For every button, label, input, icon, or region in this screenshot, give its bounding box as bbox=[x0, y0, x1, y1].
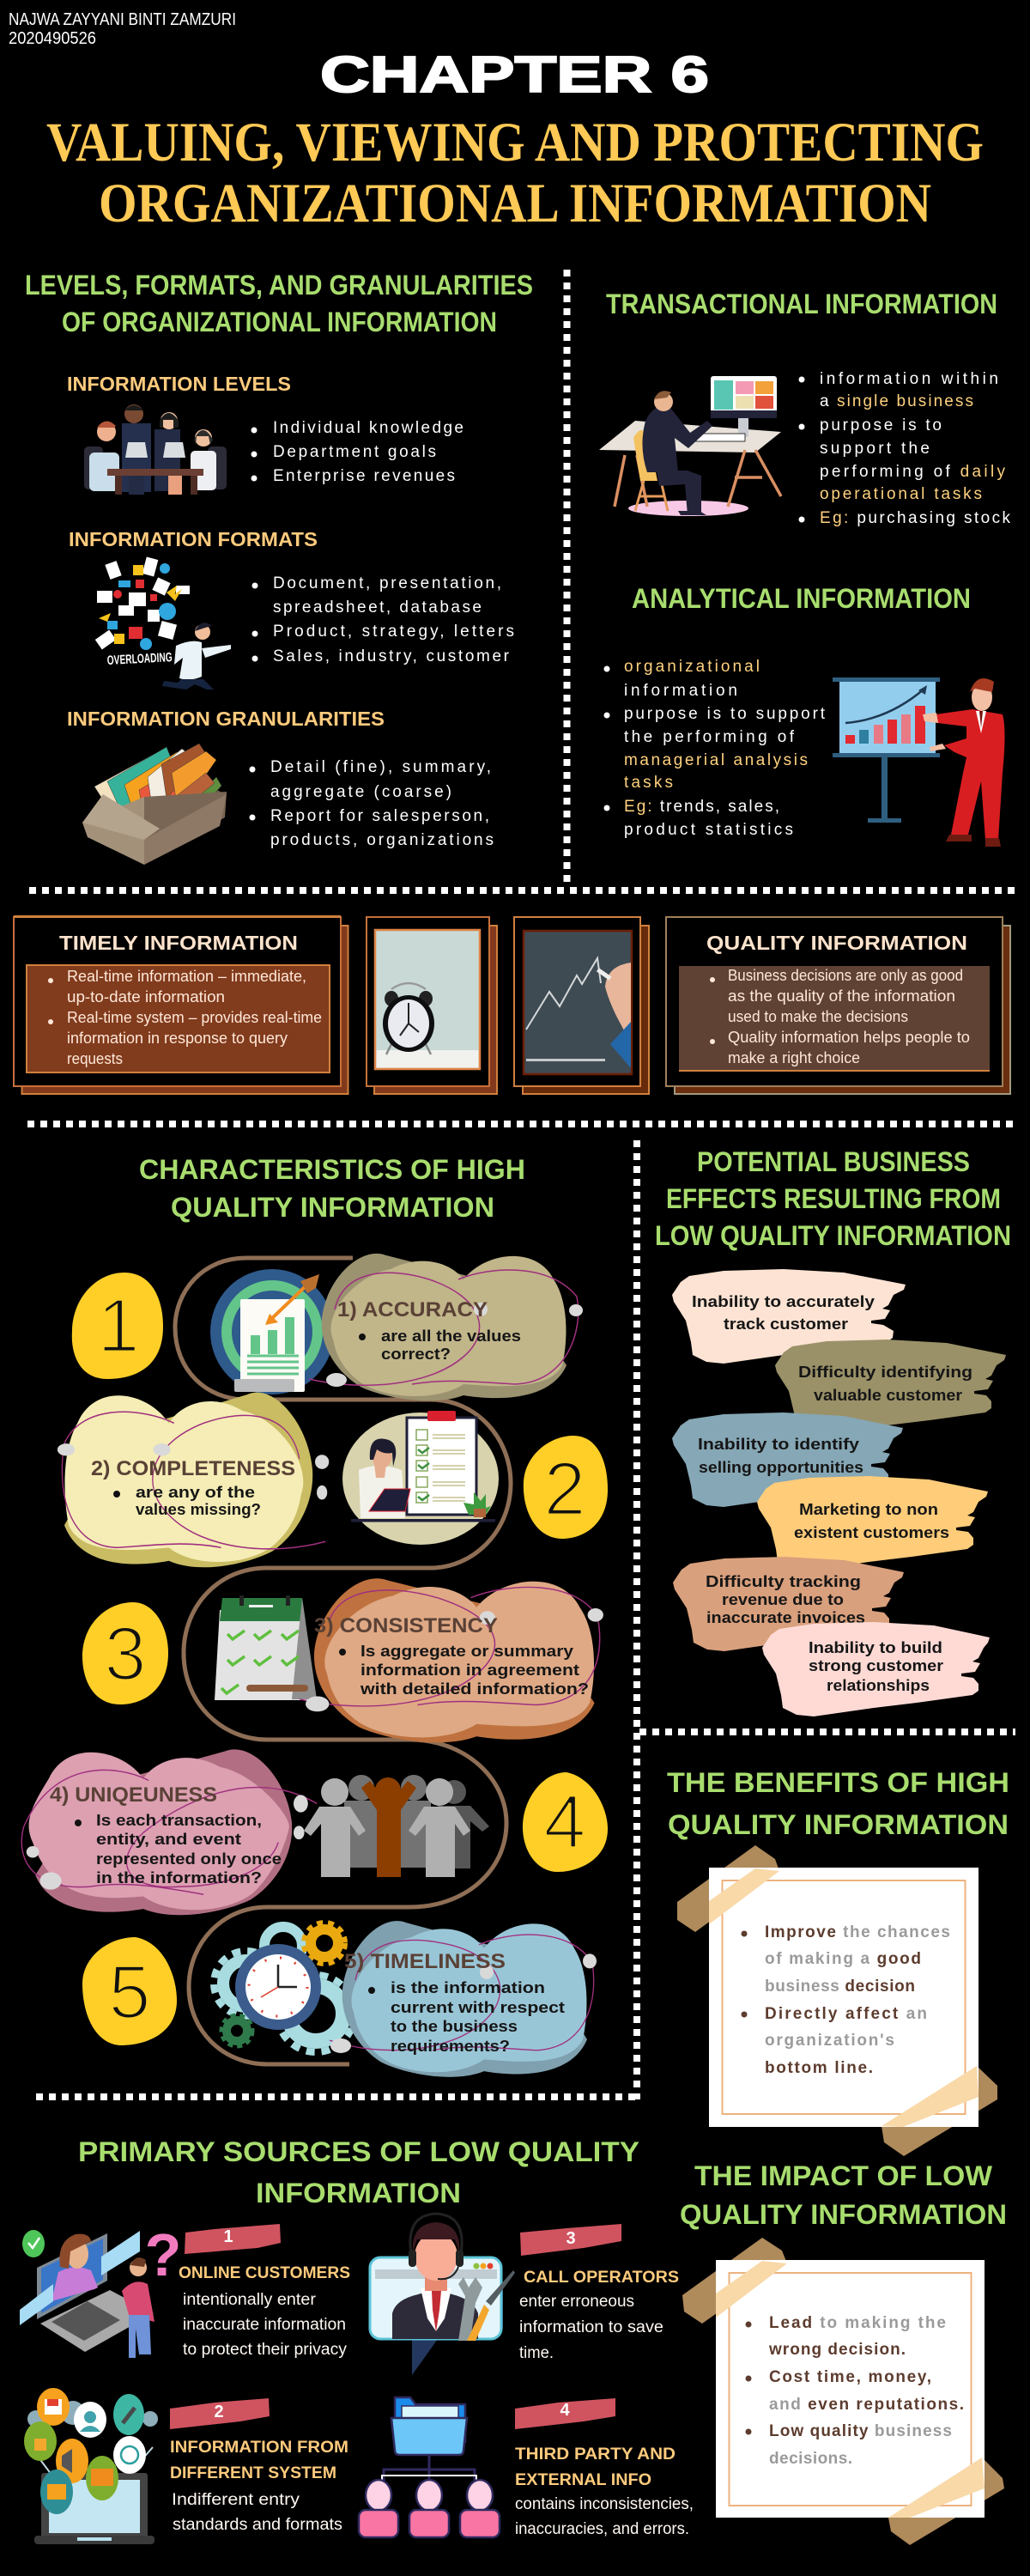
card: completeness: values missing? bbox=[136, 1501, 261, 1518]
text: call operators: enter erroneous bbox=[519, 2293, 634, 2311]
icon: group of people bbox=[304, 1775, 489, 1877]
list: levels bbox=[251, 419, 464, 485]
list: levels: Department goals bbox=[273, 443, 436, 461]
brush card: selling opportunities: Inability to identify bbox=[698, 1436, 859, 1453]
author name and id bbox=[9, 10, 236, 48]
red label 2: 2 bbox=[214, 2403, 224, 2421]
text: call operators: information to save bbox=[519, 2318, 663, 2336]
number badge 4: 4 bbox=[544, 1779, 585, 1864]
brush card: non existent customers: existent customers bbox=[794, 1524, 949, 1541]
text: online customers: ONLINE CUSTOMERS bbox=[179, 2264, 350, 2282]
note card: benefits: organization's bbox=[765, 2032, 894, 2050]
red label 4: 4 bbox=[560, 2401, 570, 2420]
brush card: track customer: Inability to accurately bbox=[692, 1293, 875, 1310]
heading: characteristics: CHARACTERISTICS OF HIGH bbox=[139, 1154, 525, 1185]
icon: box of books bbox=[82, 744, 227, 865]
card: completeness: are any of the bbox=[136, 1484, 255, 1501]
note card: benefits: Directly affect an bbox=[765, 2005, 927, 2023]
title: chapter name bbox=[46, 112, 984, 234]
icon: target report bbox=[210, 1269, 334, 1394]
text box: timely: Real-time system – provides real-time bbox=[67, 1009, 322, 1026]
brush card: selling opportunities bbox=[672, 1413, 903, 1507]
list: transactional: a single business bbox=[820, 392, 973, 410]
icon: business meeting bbox=[84, 404, 227, 495]
brush card: track customer: track customer bbox=[724, 1315, 848, 1333]
list: transactional: support the bbox=[820, 440, 930, 458]
tape: top left bbox=[677, 1845, 779, 1932]
subheading: information formats: INFORMATION FORMATS bbox=[69, 528, 318, 550]
text box: quality: Quality information helps people to bbox=[728, 1029, 970, 1046]
brush card: inaccurate invoices: Difficulty tracking bbox=[706, 1573, 861, 1590]
list: analytical bbox=[604, 658, 826, 839]
tape: top left bbox=[682, 2238, 787, 2324]
icon: gears and clock bbox=[214, 1923, 354, 2052]
list: analytical: product statistics bbox=[624, 821, 793, 839]
card: timeliness: to the business bbox=[391, 2018, 518, 2035]
card: uniqueness: 4) UNIQEUNESS bbox=[50, 1783, 217, 1807]
panel: benefits of high quality information bbox=[667, 1767, 1009, 2156]
heading: potential effects bbox=[655, 1146, 1011, 1251]
brush card: non existent customers: Marketing to non bbox=[799, 1501, 938, 1518]
list: analytical: purpose is to support bbox=[624, 705, 826, 723]
card: consistency: with detailed information? bbox=[360, 1680, 589, 1698]
list: formats: Product, strategy, letters bbox=[273, 623, 514, 641]
glyph: question mark: ? bbox=[145, 2221, 181, 2288]
card: accuracy: correct? bbox=[381, 1346, 451, 1363]
red label 1: 1 bbox=[223, 2227, 233, 2246]
heading: benefits: QUALITY INFORMATION bbox=[668, 1809, 1009, 1840]
panel: impact of low quality information bbox=[680, 2160, 1007, 2545]
card: consistency: Is aggregate or summary bbox=[360, 1643, 573, 1660]
number badge 1 bbox=[72, 1273, 163, 1379]
text: third party and external info: THIRD PARTY AND bbox=[515, 2445, 676, 2464]
text: third party and external info: inaccuracies, and errors. bbox=[515, 2520, 689, 2538]
icon: calendar bbox=[215, 1595, 317, 1700]
red label 2 bbox=[170, 2398, 270, 2429]
text box: timely: Real-time information – immediate, bbox=[67, 968, 306, 985]
card: timeliness: current with respect bbox=[391, 1999, 565, 2016]
text box: timely bbox=[27, 965, 330, 1072]
title: chapter: CHAPTER 6 bbox=[320, 46, 709, 103]
text: information from different system: INFORMATION FROM bbox=[170, 2439, 348, 2457]
heading: levels: OF ORGANIZATIONAL INFORMATION bbox=[62, 307, 497, 337]
panel: potential business effects bbox=[655, 1146, 1011, 1716]
heading: transactional: TRANSACTIONAL INFORMATION bbox=[606, 289, 997, 319]
panel: levels, formats and granularities bbox=[25, 270, 533, 865]
note card: impact: decisions. bbox=[769, 2450, 852, 2468]
icon: information overload bbox=[95, 557, 231, 690]
note card: impact: Lead to making the bbox=[769, 2314, 946, 2332]
card: consistency bbox=[300, 1578, 603, 1742]
note card: benefits: bottom line. bbox=[765, 2059, 873, 2077]
card: consistency: 3) CONSISTENCY bbox=[314, 1614, 498, 1637]
text: online customers: intentionally enter bbox=[183, 2291, 317, 2309]
card: uniqueness: entity, and event bbox=[96, 1831, 241, 1848]
list: granularities: Detail (fine), summary, bbox=[270, 758, 491, 776]
list: transactional: operational tasks bbox=[820, 485, 982, 503]
number badge 3 bbox=[82, 1602, 168, 1704]
list: levels: Enterprise revenues bbox=[273, 467, 455, 485]
card: timeliness: 5) TIMELINESS bbox=[344, 1950, 506, 1973]
list: analytical: managerial analysis bbox=[624, 751, 808, 769]
note card: impact bbox=[716, 2260, 985, 2518]
card: timeliness: is the information bbox=[391, 1979, 545, 1996]
card: timeliness: requirements? bbox=[391, 2038, 510, 2055]
card: accuracy: 1) ACCURACY bbox=[337, 1298, 488, 1321]
note card: impact: wrong decision. bbox=[768, 2341, 906, 2359]
panel: clock photo bbox=[367, 917, 497, 1094]
panel: quality information bbox=[666, 917, 1010, 1094]
note card: benefits: of making a good bbox=[765, 1950, 921, 1968]
panel: transactional information bbox=[599, 289, 1011, 527]
note card: impact: and even reputations. bbox=[769, 2396, 964, 2414]
icon: online customer at laptop bbox=[20, 2221, 181, 2358]
author name and id: NAJWA ZAYYANI BINTI ZAMZURI bbox=[9, 10, 236, 29]
brush card: selling opportunities: selling opportunities bbox=[699, 1459, 863, 1476]
number badge 2 bbox=[524, 1436, 608, 1539]
heading: characteristics bbox=[139, 1154, 525, 1223]
list: levels: Individual knowledge bbox=[273, 419, 464, 437]
list: granularities: aggregate (coarse) bbox=[270, 783, 451, 801]
brush card: valuable customer bbox=[775, 1340, 1006, 1434]
card: consistency: information in agreement bbox=[360, 1662, 579, 1679]
number badge 5 bbox=[82, 1937, 177, 2045]
text: online customers: inaccurate information bbox=[183, 2316, 346, 2334]
heading: levels: LEVELS, FORMATS, AND GRANULARITIES bbox=[25, 270, 533, 301]
text: call operators: CALL OPERATORS bbox=[524, 2269, 679, 2287]
card: uniqueness: Is each transaction, bbox=[96, 1812, 262, 1829]
text: information from different system: standards and formats bbox=[173, 2516, 342, 2534]
heading: primary sources bbox=[78, 2136, 639, 2208]
note card: benefits bbox=[709, 1868, 978, 2127]
list: analytical: Eg: trends, sales, bbox=[624, 798, 779, 816]
red label 1 bbox=[185, 2224, 281, 2254]
number badge 2: 2 bbox=[544, 1446, 585, 1531]
list: transactional: performing of daily bbox=[820, 463, 1006, 481]
text box: quality bbox=[679, 966, 990, 1072]
text box: quality: Business decisions are only as good bbox=[728, 967, 963, 984]
text box: quality: used to make the decisions bbox=[728, 1008, 908, 1025]
icon: checklist and woman bbox=[342, 1411, 499, 1545]
list: transactional: Eg: purchasing stock bbox=[820, 509, 1011, 527]
brush card: inaccurate invoices: inaccurate invoices bbox=[706, 1609, 865, 1626]
note card: benefits: business decision bbox=[765, 1978, 915, 1996]
heading: impact bbox=[680, 2160, 1007, 2230]
list: formats: Document, presentation, bbox=[273, 574, 501, 592]
title: chapter name: ORGANIZATIONAL INFORMATION bbox=[99, 173, 931, 234]
card title: quality: QUALITY INFORMATION bbox=[706, 932, 967, 954]
card: uniqueness: in the information? bbox=[96, 1869, 262, 1886]
panel: analytical information bbox=[604, 583, 1004, 847]
note card: impact: Cost time, money, bbox=[769, 2368, 931, 2386]
list: transactional: purpose is to bbox=[820, 416, 942, 434]
card: uniqueness: represented only once bbox=[96, 1850, 282, 1868]
note card: benefits: Improve the chances bbox=[765, 1923, 950, 1941]
panel: primary sources of low quality information bbox=[20, 2136, 694, 2544]
card: uniqueness bbox=[21, 1749, 317, 1915]
text: information from different system: Indifferent entry bbox=[172, 2491, 300, 2509]
card: accuracy bbox=[309, 1254, 583, 1400]
list: granularities: Report for salesperson, bbox=[270, 807, 489, 825]
icon: folder hierarchy bbox=[359, 2397, 500, 2537]
card title: timely: TIMELY INFORMATION bbox=[59, 932, 298, 954]
text: information from different system bbox=[170, 2439, 348, 2534]
text: call operators: time. bbox=[519, 2344, 554, 2362]
icon: call operator bbox=[369, 2214, 515, 2375]
brush card: non existent customers bbox=[757, 1476, 988, 1571]
card: completeness bbox=[58, 1393, 329, 1567]
list: analytical: organizational bbox=[624, 658, 760, 676]
text: information from different system: DIFFERENT SYSTEM bbox=[170, 2464, 336, 2482]
text: third party and external info: EXTERNAL INFO bbox=[515, 2471, 651, 2489]
brush card: inaccurate invoices bbox=[673, 1557, 904, 1651]
red label 3 bbox=[520, 2224, 621, 2256]
label: overloading: OVERLOADING bbox=[106, 650, 173, 668]
subheading: information granularities: INFORMATION GRANULARITIES bbox=[67, 708, 385, 730]
heading: characteristics: QUALITY INFORMATION bbox=[171, 1192, 494, 1223]
icon: man at video call desk bbox=[599, 376, 781, 516]
list: analytical: tasks bbox=[624, 774, 673, 792]
card: accuracy: are all the values bbox=[381, 1327, 521, 1345]
subheading: information levels: INFORMATION LEVELS bbox=[67, 373, 291, 395]
brush card: customer relationships bbox=[762, 1622, 990, 1716]
text box: quality: make a right choice bbox=[728, 1049, 860, 1066]
list: formats: Sales, industry, customer bbox=[273, 647, 510, 665]
heading: primary sources: INFORMATION bbox=[256, 2178, 461, 2208]
brush card: valuable customer: Difficulty identifying bbox=[798, 1364, 972, 1381]
brush card: customer relationships: relationships bbox=[827, 1677, 930, 1694]
brush card: customer relationships: Inability to build bbox=[809, 1639, 942, 1656]
list: analytical: information bbox=[624, 682, 737, 700]
icon: presenter with chart bbox=[833, 677, 1004, 847]
number badge 4 bbox=[523, 1772, 608, 1872]
text: online customers: to protect their privacy bbox=[183, 2341, 347, 2359]
text: online customers bbox=[179, 2264, 350, 2359]
red label 3: 3 bbox=[566, 2229, 576, 2248]
list: formats: spreadsheet, database bbox=[273, 598, 482, 617]
heading: benefits: THE BENEFITS OF HIGH bbox=[667, 1767, 1009, 1798]
heading: primary sources: PRIMARY SOURCES OF LOW QUALITY bbox=[78, 2136, 639, 2167]
tape: bottom right bbox=[882, 2066, 997, 2156]
list: granularities bbox=[249, 758, 494, 849]
number badge 1: 1 bbox=[98, 1283, 139, 1368]
text box: quality: as the quality of the information bbox=[728, 987, 955, 1005]
author name and id: 2020490526 bbox=[9, 29, 96, 48]
tape: bottom right bbox=[888, 2458, 1004, 2545]
text box: timely: information in response to query bbox=[67, 1030, 288, 1047]
brush card: valuable customer: valuable customer bbox=[814, 1387, 962, 1404]
icon: information from systems bbox=[24, 2388, 158, 2544]
list: transactional: information within bbox=[820, 370, 998, 388]
heading: benefits bbox=[667, 1767, 1009, 1840]
number badge 5: 5 bbox=[109, 1949, 150, 2034]
card: timeliness bbox=[330, 1921, 597, 2077]
list: granularities: products, organizations bbox=[270, 831, 494, 849]
text: third party and external info bbox=[515, 2445, 694, 2538]
panel: chalkboard photo bbox=[514, 917, 649, 1094]
panel: timely information bbox=[14, 915, 348, 1094]
heading: potential effects: POTENTIAL BUSINESS bbox=[697, 1146, 970, 1177]
list: formats bbox=[252, 574, 514, 665]
brush card: customer relationships: strong customer bbox=[809, 1657, 943, 1674]
card: completeness: 2) COMPLETENESS bbox=[91, 1457, 295, 1480]
brush card: inaccurate invoices: revenue due to bbox=[722, 1591, 844, 1608]
red label 4 bbox=[515, 2398, 615, 2429]
heading: impact: THE IMPACT OF LOW bbox=[694, 2160, 993, 2191]
heading: levels bbox=[25, 270, 533, 337]
text: call operators bbox=[519, 2269, 679, 2362]
panel: characteristics of high quality information bbox=[21, 1154, 608, 2077]
list: analytical: the performing of bbox=[624, 728, 795, 746]
number badge 3: 3 bbox=[105, 1611, 146, 1696]
text box: timely: up-to-date information bbox=[67, 988, 225, 1005]
heading: analytical: ANALYTICAL INFORMATION bbox=[632, 583, 971, 614]
text: third party and external info: contains inconsistencies, bbox=[515, 2495, 694, 2513]
brush card: track customer bbox=[672, 1269, 906, 1364]
note card: impact: Low quality business bbox=[769, 2422, 952, 2440]
heading: impact: QUALITY INFORMATION bbox=[680, 2199, 1007, 2230]
text box: timely: requests bbox=[67, 1050, 123, 1067]
list: transactional bbox=[798, 370, 1011, 527]
